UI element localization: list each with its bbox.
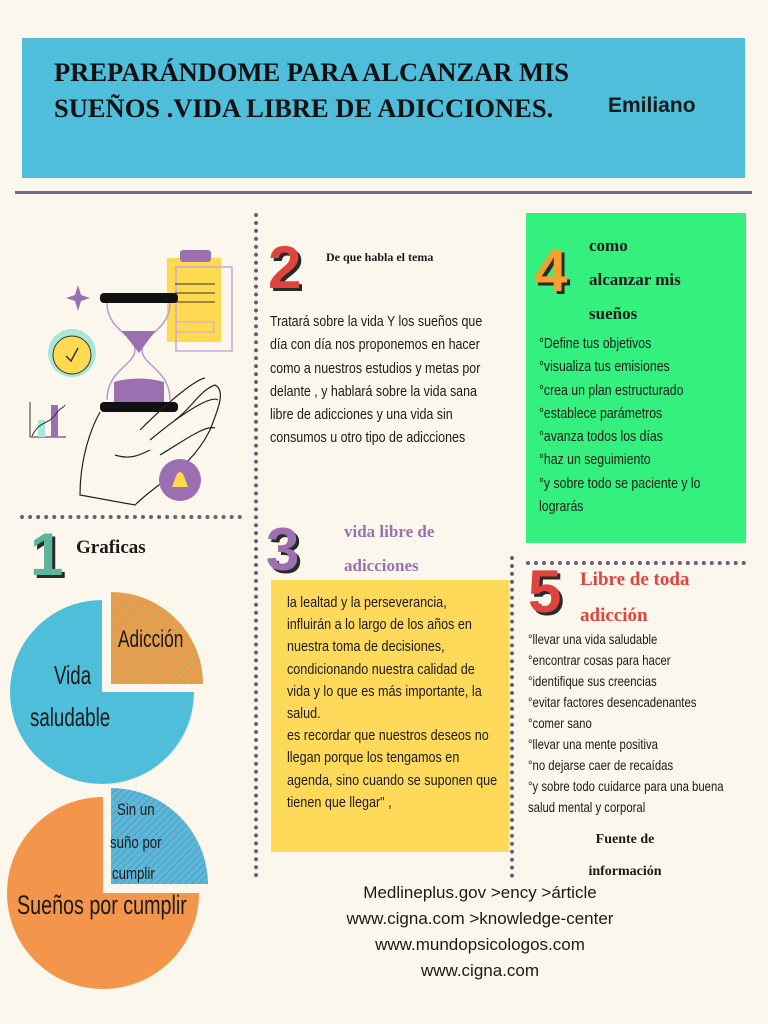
section 3 yellow panel: condicionando nuestra calidad de	[287, 661, 475, 678]
sources list: www.cigna.com >knowledge-center	[347, 909, 613, 928]
section 4 green panel	[526, 213, 746, 543]
sources heading	[588, 832, 662, 879]
section 5: °llevar una mente positiva	[528, 736, 658, 752]
section 4 green panel: °y sobre todo se paciente y lo	[539, 475, 701, 492]
section 5: °y sobre todo cuidarce para una buena	[528, 778, 724, 794]
section 2: libre de adicciones y una vida sin	[270, 406, 453, 423]
text: Sin un	[117, 800, 155, 819]
sources list: Medlineplus.gov >ency >árticle	[363, 883, 597, 902]
sources heading: información	[588, 864, 662, 879]
section 4 green panel: °visualiza tus emisiones	[539, 358, 670, 375]
section 4 green panel: lograrás	[539, 498, 583, 515]
section 5: °evitar factores desencadenantes	[528, 694, 696, 710]
header banner	[22, 38, 745, 178]
section 3 yellow panel: la lealtad y la perseverancia,	[287, 594, 447, 611]
section 4 green panel: °establece parámetros	[539, 405, 662, 422]
section 4 green panel: sueños	[589, 304, 637, 323]
pie chart: vida saludable	[7, 592, 208, 989]
section 5: °no dejarse caer de recaídas	[528, 757, 673, 773]
section 5: salud mental y corporal	[528, 799, 645, 815]
text: suño por	[110, 833, 162, 852]
section 5: °identifique sus creencias	[528, 673, 657, 689]
illustration: hourglass in hand	[30, 250, 233, 506]
text: Vida	[54, 660, 91, 690]
title: PREPARÁNDOME PARA ALCANZAR MIS	[54, 57, 569, 87]
section 2: De que habla el tema	[326, 250, 433, 264]
section 4 green panel: °Define tus objetivos	[539, 335, 651, 352]
section 3 heading: 3	[266, 516, 299, 583]
sources heading: Fuente de	[596, 832, 654, 847]
section 2: como a nuestros estudios y metas por	[270, 360, 480, 377]
pie labels: Adicción	[118, 626, 183, 653]
section 2: consumos u otro tipo de adicciones	[270, 429, 465, 446]
section 3 yellow panel	[271, 580, 509, 852]
section 4 green panel: alcanzar mis	[589, 270, 681, 289]
section 3 yellow panel: influirán a lo largo de los años en	[287, 616, 472, 633]
section 5: adicción	[580, 605, 648, 626]
section 5: °comer sano	[528, 715, 592, 731]
section 1 heading: 1	[30, 521, 63, 588]
section 2	[268, 234, 482, 446]
section 1 heading: Graficas	[76, 537, 146, 558]
section 3 yellow panel: es recordar que nuestros deseos no	[287, 727, 489, 744]
sources list: www.mundopsicologos.com	[375, 935, 585, 954]
section 3 yellow panel: tienen que llegar" ,	[287, 794, 392, 811]
text: saludable	[30, 702, 110, 732]
section 4 green panel: °haz un seguimiento	[539, 451, 651, 468]
section 2: 2	[268, 234, 301, 301]
section 4 green panel: °avanza todos los días	[539, 428, 663, 445]
section 2: Tratará sobre la vida Y los sueños que	[270, 313, 482, 330]
section 5: Libre de toda	[580, 569, 689, 590]
section 5: °encontrar cosas para hacer	[528, 652, 671, 668]
section 3 yellow panel: salud.	[287, 705, 321, 722]
section 3 heading: adicciones	[344, 556, 419, 575]
section 3 heading	[266, 516, 434, 583]
title: SUEÑOS .VIDA LIBRE DE ADICCIONES.	[54, 93, 553, 123]
sources list	[346, 883, 614, 980]
section 3 yellow panel: nuestra toma de decisiones,	[287, 638, 445, 655]
section 4 green panel: como	[589, 236, 628, 255]
author: Emiliano	[608, 94, 696, 117]
section 4 green panel: 4	[534, 237, 567, 304]
sources list: www.cigna.com	[421, 961, 539, 980]
section 2: día con día nos proponemos en hacer	[270, 336, 480, 353]
section 2: delante , y hablará sobre la vida sana	[270, 383, 477, 400]
text: cumplir	[112, 864, 155, 883]
section 3 heading: vida libre de	[344, 522, 434, 541]
section 4 green panel: °crea un plan estructurado	[539, 382, 683, 399]
title	[54, 57, 569, 123]
section 3 yellow panel: vida y lo que es más importante, la	[287, 683, 482, 700]
section 3 yellow panel: llegan porque los tengamos en	[287, 749, 459, 766]
section 5: °llevar una vida saludable	[528, 631, 657, 647]
section 5: 5	[528, 558, 561, 625]
text: Sueños por cumplir	[17, 890, 187, 920]
section 3 yellow panel: agenda, sino cuando se suponen que	[287, 772, 497, 789]
section 1 heading	[30, 521, 146, 588]
section 5	[528, 558, 724, 815]
